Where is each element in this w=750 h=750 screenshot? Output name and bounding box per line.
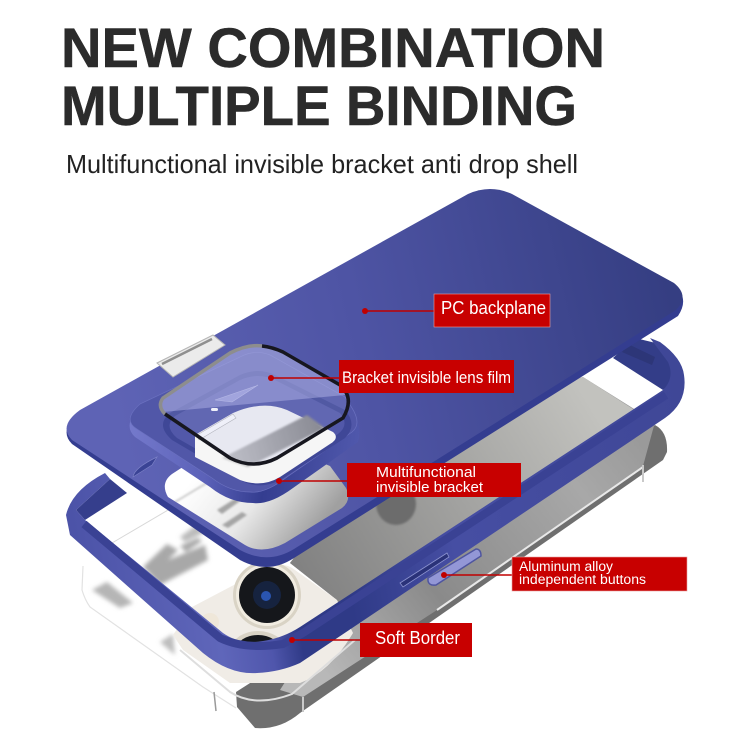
camera module <box>173 565 353 683</box>
ring face <box>130 352 357 492</box>
callout: aluminum buttons: independent buttons <box>519 572 646 587</box>
infographic canvas <box>64 28 688 728</box>
bracket small slot <box>211 408 218 411</box>
soft border frame <box>66 338 685 673</box>
plate slot <box>133 457 157 477</box>
callout: PC backplane <box>362 294 550 327</box>
phone edge line <box>112 503 180 543</box>
frame inner strip <box>84 395 666 646</box>
ring lip <box>130 355 360 503</box>
callout: bracket <box>276 463 521 497</box>
shadow stripes <box>143 520 230 585</box>
callout: soft border <box>289 623 472 657</box>
title: MULTIPLE BINDING <box>61 74 577 137</box>
plate window <box>165 430 348 550</box>
rim stripe <box>92 582 133 608</box>
opening gray band <box>222 415 325 467</box>
subtitle: Multifunctional invisible bracket anti drop shell <box>66 149 578 179</box>
hinge <box>157 335 225 377</box>
callout: bracket: invisible bracket <box>376 479 484 496</box>
window stripes <box>174 483 248 529</box>
side seam <box>303 465 643 712</box>
aluminum button <box>428 549 481 585</box>
callout: lens film: Bracket invisible lens film <box>342 369 511 387</box>
camera lens 2 <box>231 631 285 669</box>
side clear corner <box>214 692 216 711</box>
apple logo <box>376 483 416 525</box>
callout: aluminum buttons <box>441 557 687 591</box>
callout: PC backplane: PC backplane <box>441 298 546 318</box>
title <box>61 16 605 137</box>
lens black edge <box>165 346 348 464</box>
frame body <box>66 338 685 673</box>
label <box>434 294 550 327</box>
bracket light bar <box>197 414 236 440</box>
side button slot <box>400 553 449 587</box>
frame inner wall <box>613 338 679 390</box>
title: NEW COMBINATION <box>61 16 605 79</box>
lens glass <box>160 345 348 464</box>
callout: lens film <box>268 360 514 393</box>
bracket detail <box>215 385 258 402</box>
clear rim lines <box>180 640 355 701</box>
phone back upper glass <box>290 377 650 625</box>
speaker holes <box>622 344 655 365</box>
rim stripe near module <box>160 634 175 655</box>
phone body <box>82 377 667 728</box>
lens film <box>160 345 348 464</box>
frame corner inner wall <box>76 479 127 520</box>
multifunctional bracket ring <box>130 352 360 503</box>
callout: aluminum buttons: Aluminum alloy <box>519 559 613 574</box>
callout: soft border: Soft Border <box>375 628 460 648</box>
opening view <box>195 406 336 483</box>
ring opening <box>163 371 352 485</box>
clear case rim <box>82 566 236 708</box>
lens gray edge <box>160 346 262 414</box>
flash <box>201 613 219 631</box>
lens gleam <box>161 345 345 412</box>
highlight line <box>437 467 643 610</box>
pointer <box>365 310 434 312</box>
camera lens 1 <box>233 561 301 629</box>
phone side band <box>236 425 667 728</box>
callout: bracket: Multifunctional <box>376 464 476 481</box>
opening shelf <box>169 376 345 479</box>
PC backplane <box>67 189 683 567</box>
plate edge <box>67 191 683 567</box>
phone back glass <box>280 377 655 697</box>
plate face <box>67 189 683 557</box>
